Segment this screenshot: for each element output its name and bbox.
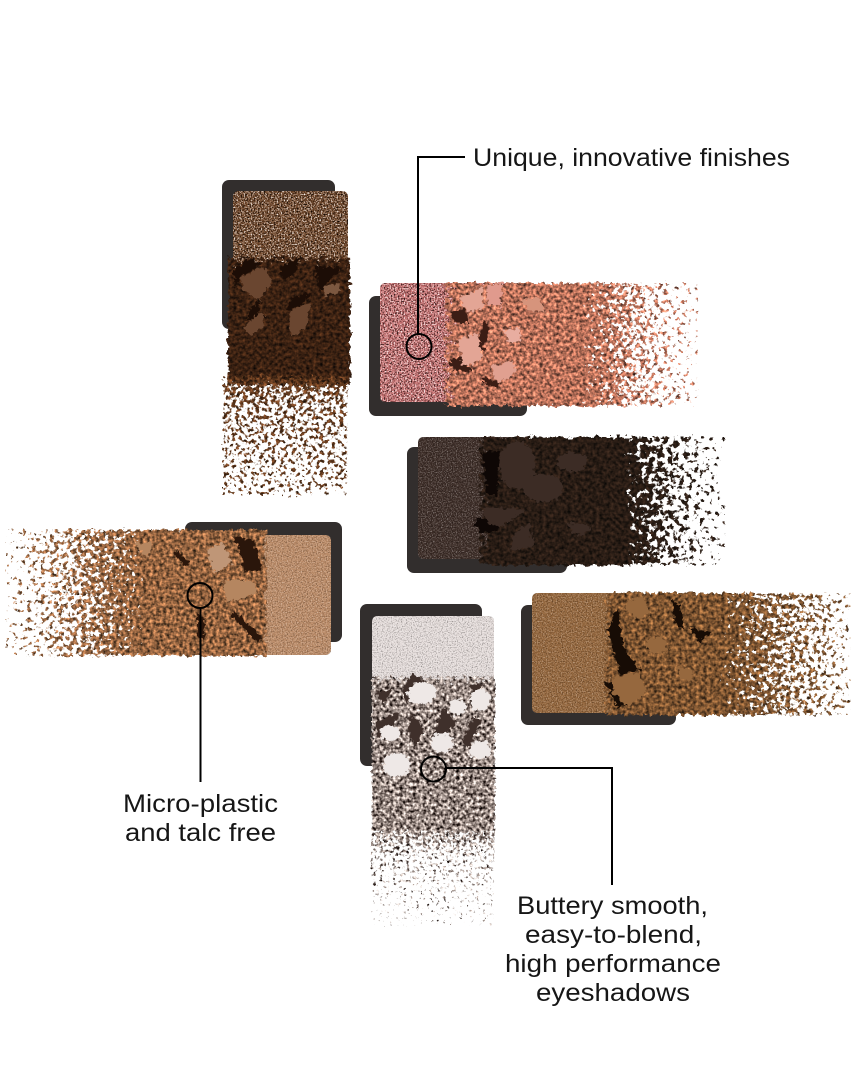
crevices <box>234 256 340 322</box>
callout text: Micro-plastic <box>123 790 278 818</box>
swatch: tan satin, horizontal facing left <box>8 522 342 656</box>
callout text: easy-to-blend, <box>525 921 702 949</box>
leader line and ring <box>421 756 612 885</box>
pressed pan <box>418 437 528 559</box>
pressed pan <box>233 191 348 301</box>
pressed pan <box>532 593 642 713</box>
crevices <box>374 674 484 748</box>
crumble and particles <box>445 283 700 406</box>
swatch: bronze shimmer, vertical <box>222 180 350 498</box>
crevices <box>450 307 500 387</box>
swatch: rose shimmer, horizontal <box>369 283 700 416</box>
compact case shadow <box>185 522 342 642</box>
broken flakes <box>133 543 257 603</box>
compact case shadow <box>360 604 482 766</box>
leader line and ring <box>406 157 465 359</box>
callout text: Buttery smooth, <box>517 892 708 920</box>
broken flakes <box>380 682 491 777</box>
compact case shadow <box>369 296 527 416</box>
crevices <box>605 600 712 708</box>
callout: unique finishes <box>406 144 790 359</box>
compact case shadow <box>521 605 676 725</box>
swatch: espresso matte, horizontal <box>407 437 727 573</box>
callout text: high performance <box>505 950 721 978</box>
pressed pan <box>240 535 331 655</box>
broken flakes <box>240 267 340 337</box>
powder base covering the case <box>185 533 245 655</box>
compact case shadow <box>222 180 335 329</box>
crumble and particles <box>605 593 852 715</box>
callout text: and talc free <box>125 819 276 847</box>
callout text: eyeshadows <box>536 979 690 1007</box>
dense crumble <box>228 257 350 385</box>
broken flakes <box>613 597 693 707</box>
falling particles <box>224 376 348 498</box>
swatch: pearl shimmer, vertical <box>360 604 495 926</box>
callout: micro-plastic and talc free <box>123 583 285 847</box>
broken flakes <box>483 441 592 550</box>
pressed pan <box>372 616 494 736</box>
crevices <box>175 537 263 642</box>
callout text: Unique, innovative finishes <box>473 144 790 172</box>
callout: buttery smooth eyeshadows <box>421 756 728 1007</box>
crevices <box>474 450 500 534</box>
crumble and particles <box>480 437 727 565</box>
crumble and particles <box>8 530 268 656</box>
crumble and particles <box>372 676 495 926</box>
swatch: caramel matte, horizontal <box>521 593 852 725</box>
leader line and ring <box>188 583 212 782</box>
broken flakes <box>457 283 545 383</box>
pressed pan <box>380 283 520 402</box>
compact case shadow <box>407 447 567 573</box>
